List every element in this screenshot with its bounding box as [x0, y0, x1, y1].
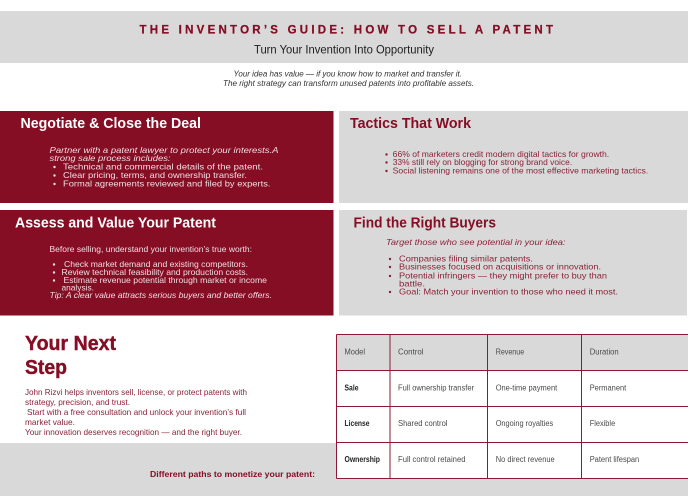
next step body text: Start with a free consultation and unlock your invention’s full: [27, 407, 246, 417]
assess body text: Check market demand and existing competitors.: [64, 259, 248, 269]
assess body text: [50, 244, 272, 300]
heading: assess: Assess and Value Your Patent: [15, 216, 216, 232]
negotiate body text: Formal agreements reviewed and filed by experts.: [63, 179, 270, 189]
buyers body text: Companies filing similar patents.: [399, 254, 533, 264]
table caption: Different paths to monetize your patent:: [150, 469, 315, 479]
buyers body text: Goal: Match your invention to those who need it most.: [399, 287, 618, 297]
heading: negotiate: Negotiate & Close the Deal: [20, 116, 201, 132]
table row: sale: Sale: [344, 384, 359, 393]
panel: negotiate and close the deal: [0, 111, 334, 203]
comparison table: [336, 334, 688, 478]
assess body text: Review technical feasibility and production costs.: [62, 267, 248, 277]
buyers body text: Potential infringers — they might prefer to buy than: [399, 271, 607, 281]
table row: sale: One-time payment: [496, 384, 558, 393]
next step body text: [25, 387, 247, 437]
table row: ownership: [344, 455, 639, 464]
table header row: Revenue: [496, 348, 524, 357]
table row: license: Ongoing royalties: [496, 419, 553, 428]
table row: ownership: Full control retained: [398, 455, 466, 464]
panel: assess and value: [0, 210, 334, 316]
heading: your next step: Your Next: [25, 333, 116, 355]
next step body text: strategy, precision, and trust.: [25, 397, 130, 407]
table row: license: License: [344, 419, 370, 428]
negotiate body text: Partner with a patent lawyer to protect your interests.A: [50, 145, 279, 155]
heading: your next step: [25, 333, 116, 379]
table row: license: Shared control: [398, 419, 448, 428]
next step body text: Your innovation deserves recognition — and the right buyer.: [25, 427, 242, 437]
tactics bullet list: Social listening remains one of the most effective marketing tactics.: [393, 166, 648, 176]
negotiate body text: strong sale process includes:: [50, 153, 171, 163]
assess body text: Before selling, understand your invention’s true worth:: [50, 244, 252, 254]
table row: sale: Permanent: [590, 384, 627, 393]
table row: ownership: Ownership: [344, 455, 380, 464]
table header row: Duration: [590, 348, 619, 357]
buyers body text: Businesses focused on acquisitions or innovation.: [399, 262, 601, 272]
buyers body text: battle.: [399, 279, 425, 289]
next step body text: John Rizvi helps inventors sell, license, or protect patents with: [25, 387, 247, 397]
buyers body text: Target those who see potential in your idea:: [386, 237, 566, 247]
heading: find buyers: Find the Right Buyers: [354, 216, 496, 232]
table row: ownership: Patent lifespan: [590, 455, 639, 464]
tactics bullet list: [385, 149, 648, 176]
tactics bullet list: 33% still rely on blogging for strong brand voice.: [393, 157, 572, 167]
intro text: Your idea has value — if you know how to market and transfer it.: [234, 69, 462, 79]
panel: tactics that work: [339, 111, 688, 203]
negotiate body text: Technical and commercial details of the patent.: [63, 162, 263, 172]
title: THE INVENTOR’S GUIDE: HOW TO SELL A PATENT: [140, 24, 553, 36]
tactics bullet list: 66% of marketers credit modern digital tactics for growth.: [393, 149, 609, 159]
table header row: Control: [398, 348, 424, 357]
table row: sale: [344, 384, 627, 393]
bottom grey band: [0, 443, 688, 496]
intro text: [223, 69, 474, 88]
table header row: [344, 348, 619, 357]
table row: ownership: No direct revenue: [496, 455, 555, 464]
negotiate body text: [50, 145, 279, 189]
next step body text: market value.: [25, 417, 75, 427]
assess body text: Tip: A clear value attracts serious buyers and better offers.: [50, 290, 272, 300]
intro text: The right strategy can transform unused patents into profitable assets.: [223, 78, 474, 88]
buyers body text: [386, 237, 618, 297]
panel: find the right buyers: [339, 210, 687, 316]
heading: tactics: Tactics That Work: [350, 116, 472, 132]
table row: sale: Full ownership transfer: [398, 384, 474, 393]
negotiate body text: Clear pricing, terms, and ownership transfer.: [63, 170, 247, 180]
assess body text: Estimate revenue potential through market or income: [64, 275, 267, 285]
table header row: Model: [344, 348, 365, 357]
table row: license: [344, 419, 615, 428]
header band: [0, 11, 688, 63]
table row: license: Flexible: [590, 419, 615, 428]
subtitle: Turn Your Invention Into Opportunity: [254, 42, 434, 56]
heading: your next step: Step: [25, 357, 67, 379]
assess body text: analysis.: [62, 282, 94, 292]
